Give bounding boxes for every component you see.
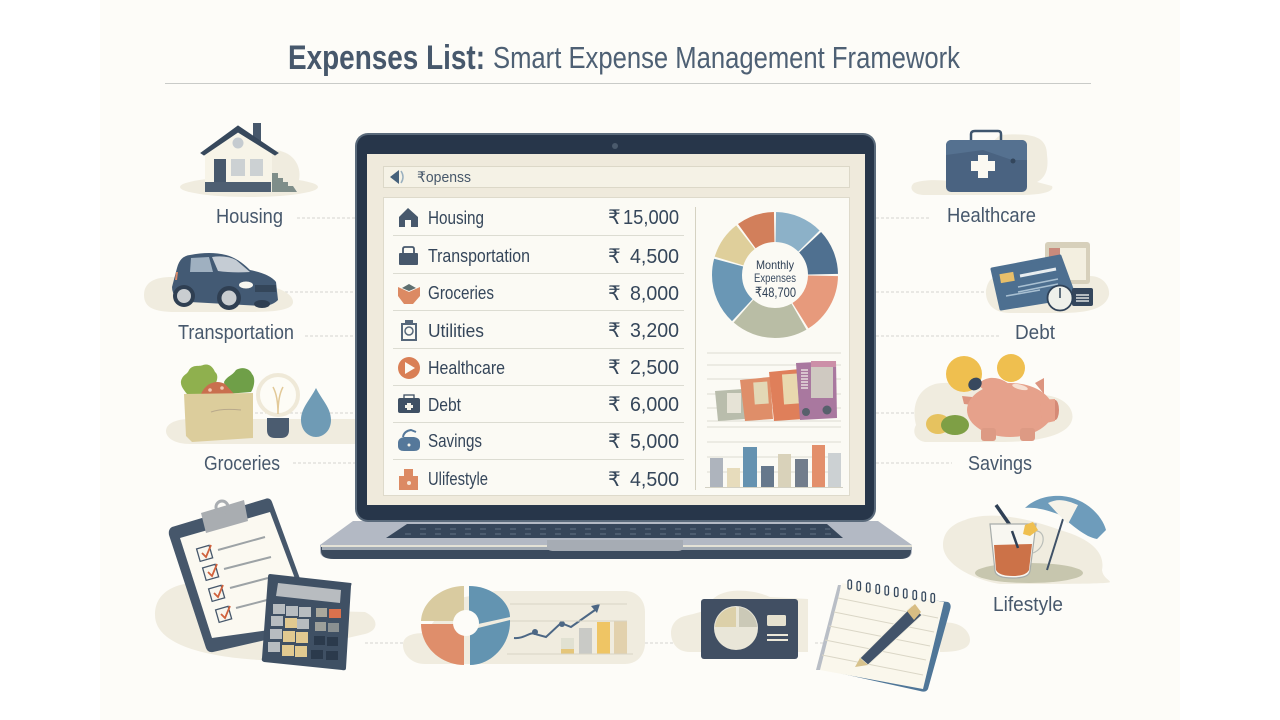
donut chart: Expenses — [754, 271, 796, 285]
row: Debt: Debt — [428, 394, 461, 415]
icon: drink and umbrella — [943, 496, 1110, 584]
row: Utilities: 3,200 — [630, 320, 679, 342]
binder chart — [707, 353, 841, 427]
row: Transportation: Transportation — [428, 245, 530, 266]
icon: clipboard — [155, 498, 376, 661]
donut chart: Monthly — [756, 258, 794, 272]
row: Debt: 6,000 — [630, 394, 679, 416]
row: Lifestyle — [399, 468, 679, 491]
row: Housing: ₹ — [608, 207, 621, 229]
row: Housing — [399, 207, 679, 229]
icon: credit card and clock — [986, 242, 1109, 313]
row: Healthcare: Healthcare — [428, 357, 505, 378]
label: Groceries: Groceries — [204, 453, 280, 475]
title: Expenses List: — [288, 39, 485, 77]
label: Housing: Housing — [216, 206, 283, 228]
icon: medical bag — [911, 131, 1052, 195]
icon: notebook and pen — [816, 580, 970, 692]
donut chart — [727, 227, 823, 323]
icon: house — [180, 123, 318, 197]
row: Utilities: ₹ — [608, 320, 621, 342]
row: Housing: 15,000 — [623, 207, 679, 229]
row: Groceries: 8,000 — [630, 283, 679, 305]
row: Housing: Housing — [428, 207, 484, 228]
row: Debt — [398, 394, 679, 416]
bar chart — [705, 442, 843, 488]
laptop — [320, 133, 912, 559]
laptop base — [320, 521, 912, 559]
screen header bar: ₹openss — [417, 170, 471, 186]
row: Groceries — [398, 282, 679, 305]
icon: groceries, bulb and drop — [166, 364, 356, 444]
label: Lifestyle: Lifestyle — [993, 594, 1063, 616]
icon: dashboard card — [671, 591, 808, 659]
label: Savings: Savings — [968, 453, 1032, 475]
row: Lifestyle: ₹ — [608, 469, 621, 491]
title — [288, 39, 960, 77]
row: Healthcare: ₹ — [608, 357, 621, 379]
icon: car — [144, 253, 293, 312]
row: Transportation — [399, 245, 679, 268]
row: Healthcare: 2,500 — [630, 357, 679, 379]
screen header bar — [384, 166, 850, 188]
row: Savings: 5,000 — [630, 431, 679, 453]
row: Savings — [398, 430, 679, 453]
row: Lifestyle: 4,500 — [630, 469, 679, 491]
label: Healthcare: Healthcare — [947, 205, 1036, 227]
row: Groceries: ₹ — [608, 283, 621, 305]
row: Transportation: ₹ — [608, 246, 621, 268]
icon: piggy bank — [914, 354, 1073, 442]
expense list panel — [384, 198, 850, 496]
row: Transportation: 4,500 — [630, 246, 679, 268]
laptop bezel — [355, 133, 876, 522]
row: Groceries: Groceries — [428, 282, 494, 303]
label: Debt: Debt — [1015, 322, 1055, 344]
row: Utilities: Utilities — [428, 320, 484, 341]
icon: calculator — [262, 574, 352, 670]
row: Savings: Savings — [428, 430, 482, 451]
icon: pie and line chart — [403, 586, 645, 665]
donut chart: ₹48,700 — [755, 284, 796, 300]
label: Transportation: Transportation — [178, 322, 294, 344]
row: Utilities — [402, 320, 679, 342]
row: Debt: ₹ — [608, 394, 621, 416]
title: Smart Expense Management Framework — [493, 40, 960, 75]
row: Lifestyle: Ulifestyle — [428, 468, 488, 489]
row: Healthcare — [398, 357, 679, 379]
row: Savings: ₹ — [608, 431, 621, 453]
